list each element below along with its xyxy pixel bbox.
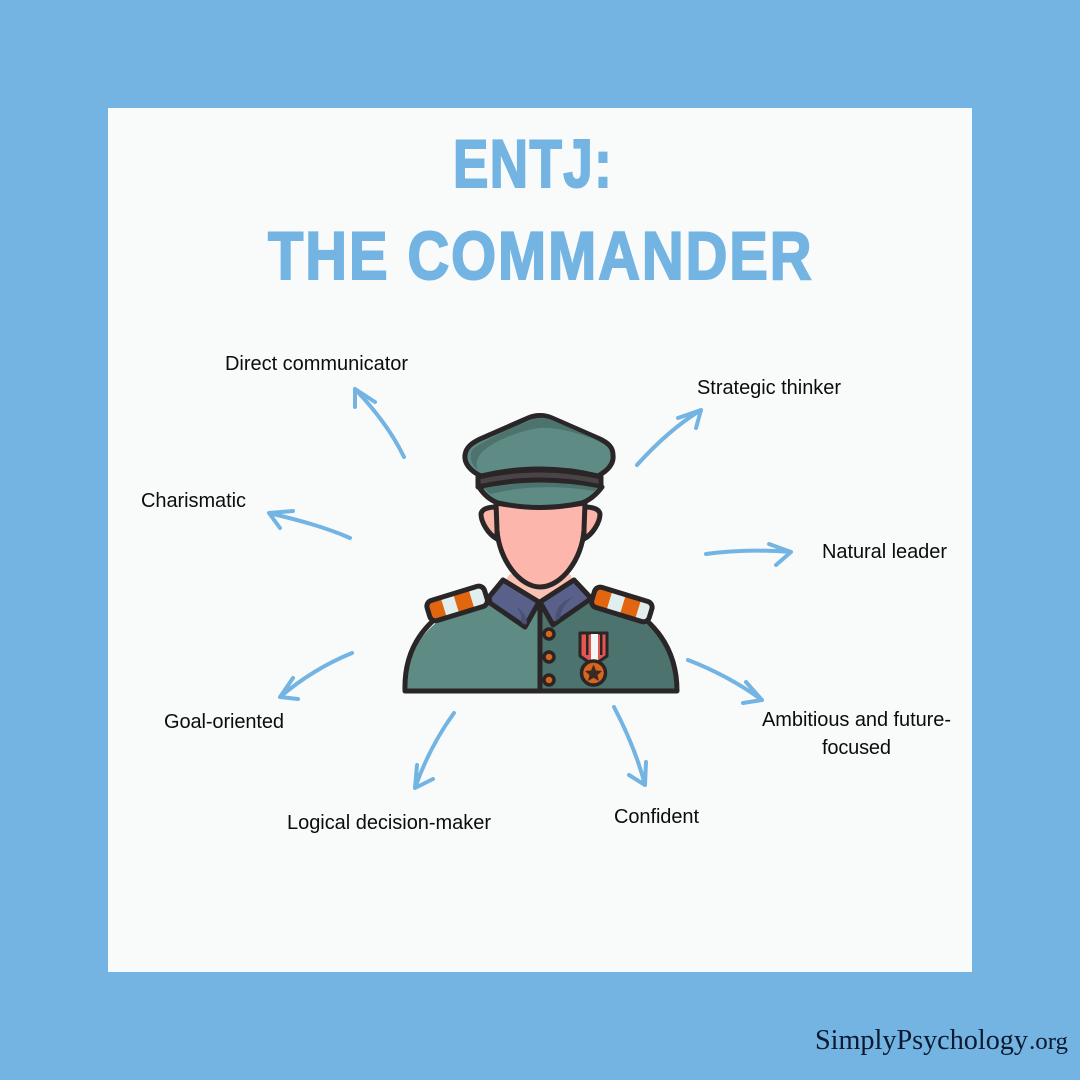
label: logical decision-maker: Logical decision-maker <box>287 812 491 834</box>
arrow: to logical decision-maker <box>415 713 454 788</box>
left ear <box>481 507 497 539</box>
title <box>268 126 813 294</box>
buttons <box>544 629 554 685</box>
neck <box>504 574 574 603</box>
label: confident: Confident <box>614 806 699 828</box>
title: THE COMMANDER <box>268 219 813 294</box>
arrow: to goal-oriented <box>280 653 352 699</box>
label: ambitious and future-focused <box>762 709 951 759</box>
right ear <box>584 507 600 539</box>
cap <box>465 416 613 508</box>
left epaulette <box>425 585 489 622</box>
footer brand: SimplyPsychology <box>815 1024 1028 1056</box>
icon: commander figure <box>405 416 677 691</box>
footer brand: .org <box>1029 1029 1068 1055</box>
arrow: to natural leader <box>706 544 791 565</box>
label: ambitious and future-focused: focused <box>822 737 891 759</box>
face <box>496 503 585 587</box>
title: ENTJ: <box>453 126 613 201</box>
arrow: to strategic thinker <box>637 410 701 465</box>
right collar <box>540 580 590 625</box>
body: uniform jacket <box>405 598 677 691</box>
left collar <box>489 580 539 627</box>
arrow: to charismatic <box>269 511 350 538</box>
label: charismatic: Charismatic <box>141 490 246 512</box>
arrow: to ambitious and future-focused <box>688 660 762 703</box>
label: ambitious and future-focused: Ambitious and future- <box>762 709 951 731</box>
label: strategic thinker: Strategic thinker <box>697 377 841 399</box>
arrow: to direct communicator <box>355 389 404 457</box>
medal <box>580 633 607 685</box>
arrow: to confident <box>614 707 646 785</box>
label: goal-oriented: Goal-oriented <box>164 711 284 733</box>
label: direct communicator: Direct communicator <box>225 353 408 375</box>
label: natural leader: Natural leader <box>822 541 947 563</box>
right epaulette <box>590 586 654 623</box>
panel: white card <box>108 108 972 972</box>
